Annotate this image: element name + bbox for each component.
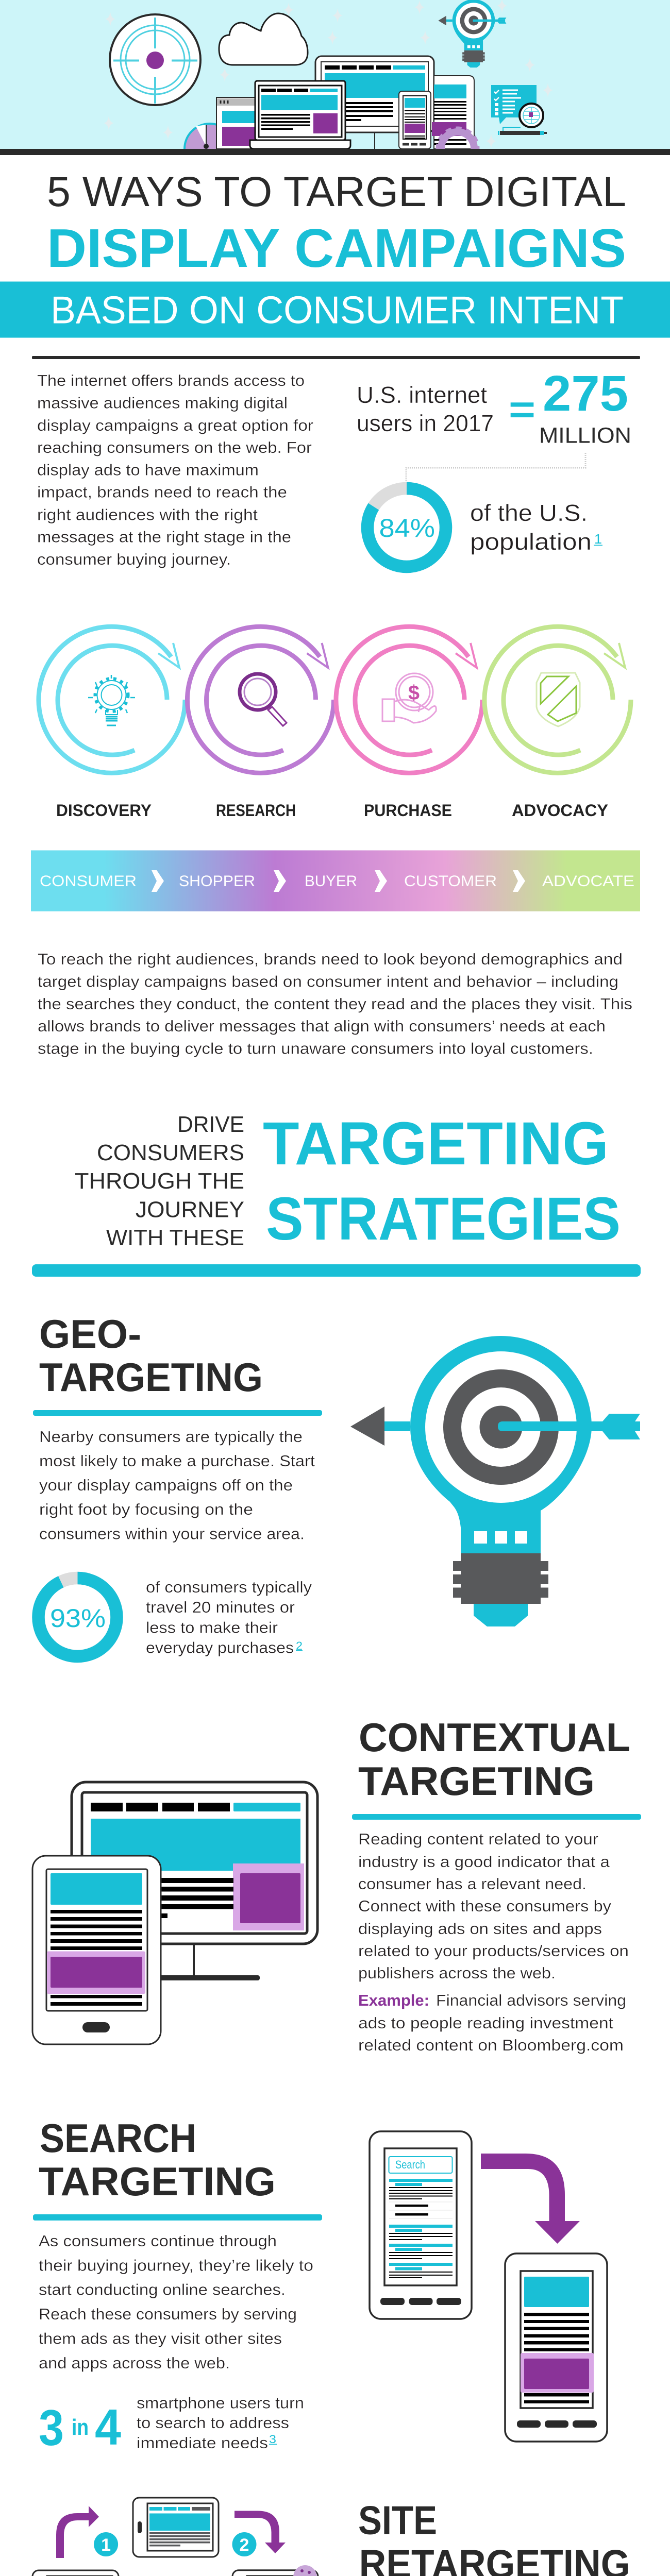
chart: 93% donut [38,1578,116,1656]
text block: contextual description: Financial advisors serving [436,1991,626,2009]
icon: gauge [183,123,216,149]
icon: cloud [219,13,308,65]
heading: geo-targeting: GEO- [39,1311,141,1357]
icon: magnifying glass [240,674,287,726]
text: 93% caption [146,1578,312,1657]
illustration: search results phone [370,2131,472,2319]
text block: contextual description: related content on Bloomberg.com [358,2036,624,2054]
stat: 3 in 4: in [72,2415,89,2440]
heading: contextual targeting [358,1715,630,1804]
chart: 84% donut: 84% [379,514,435,543]
gradient band: consumer to advocate: ADVOCATE [542,873,634,890]
panel: header illustration [0,0,670,149]
stage: advocacy loop [484,626,631,773]
heading: targeting strategies: TARGETING [263,1110,609,1178]
heading: contextual targeting: TARGETING [358,1758,595,1804]
text block: geo-targeting description [39,1428,315,1543]
illustration: desktop monitor [72,1782,317,1980]
text block: contextual description [358,1830,629,2054]
text block: geo-targeting description: right foot by focusing on the [39,1500,253,1518]
icon: target lightbulb with arrow [350,1336,640,1626]
gradient band: consumer to advocate: CUSTOMER [404,873,497,890]
heading: search targeting: SEARCH [40,2115,196,2161]
arrows: cycle [52,2506,286,2576]
text block: search description: them ads as they visit other sites [39,2329,282,2347]
text block: intro: right audiences with the right [37,506,258,523]
text: 93% caption: travel 20 minutes or [146,1598,295,1616]
banner: based on consumer intent [0,281,670,338]
heading: targeting strategies: STRATEGIES [266,1185,621,1253]
text: of the US population: 1 [594,531,602,547]
heading: drive consumers [75,1112,244,1250]
banner: based on consumer intent: BASED ON CONSUMER INTENT [51,289,624,332]
text block: intro: impact, brands need to reach the [37,483,287,501]
heading: main title [47,168,626,279]
text: smartphone stat caption: 3 [269,2433,276,2446]
text block: audience paragraph: To reach the right audiences, brands need to look beyond demographics and [38,950,623,968]
text block: intro: messages at the right stage in the [37,528,291,546]
text block: geo-targeting description: most likely to make a purchase. Start [39,1452,315,1470]
badges: cycle numbers: 1 [101,2535,111,2555]
text block: contextual description: related to your products/services on [358,1942,629,1960]
text block: geo-targeting description: your display campaigns off on the [39,1476,293,1494]
icon: shield [537,673,580,726]
heading: targeting strategies [263,1110,621,1253]
text: 93% caption: of consumers typically [146,1578,312,1596]
gradient band: consumer to advocate: BUYER [305,873,357,890]
heading: geo-targeting [39,1311,263,1400]
heading: contextual targeting: CONTEXTUAL [359,1715,630,1760]
icon: desktop monitor [315,56,434,149]
chart: 93% donut: 93% [50,1604,106,1633]
icon: globe [520,104,543,127]
labels: journey stages: PURCHASE [364,801,452,820]
labels: journey stages: ADVOCACY [512,801,608,820]
text block: audience paragraph [38,950,632,1058]
text block: contextual description: ads to people reading investment [358,2014,613,2032]
gradient band: consumer to advocate: SHOPPER [179,873,255,890]
heading: main title: DISPLAY CAMPAIGNS [47,218,626,279]
text block: intro: display campaigns a great option for [37,416,313,434]
text block: audience paragraph: allows brands to deliver messages that align with consumers’ needs at each [38,1017,606,1035]
stage: research loop [188,626,334,773]
text block: search description: start conducting online searches. [39,2280,286,2299]
stat: 275 million internet users: MILLION [539,423,631,448]
text block: search description: As consumers continue through [39,2232,277,2250]
text block: contextual description: Reading content related to your [358,1830,598,1848]
text block: search description: their buying journey, they’re likely to [39,2256,313,2274]
text: 93% caption: less to make their [146,1619,278,1636]
text block: intro: The internet offers brands access to [37,371,305,389]
icon: hand holding coin: $ [408,682,420,704]
heading: drive consumers: THROUGH THE [75,1168,244,1194]
text block: contextual description: Example: [358,1991,429,2009]
stat: 3 in 4: 4 [95,2399,121,2455]
section: contextual targeting [32,1715,641,2054]
tablet: right with cookie [232,2570,318,2576]
gradient band: consumer to advocate: CONSUMER [40,873,137,890]
text block: geo-targeting description: Nearby consumers are typically the [39,1428,303,1446]
panel: four stage cycle [39,626,631,773]
stat: 275 million internet users [357,365,631,448]
text: smartphone stat caption: immediate needs [137,2434,268,2452]
illustration: phone [32,1856,161,2044]
text: of the US population [470,500,602,555]
text block: audience paragraph: target display campaigns based on consumer intent and behavior – including [38,973,618,991]
icon: small target bulb [438,0,506,67]
text block: contextual description: consumer has a relevant need. [358,1875,587,1893]
heading: site retargeting [358,2498,630,2576]
stat: 275 million internet users: 275 [543,365,628,421]
text: smartphone stat caption: smartphone users turn [137,2394,304,2412]
text block: geo-targeting description: consumers within your service area. [39,1525,305,1543]
text block: intro: massive audiences making digital [37,394,288,412]
illustration: ad on phone [505,2253,607,2442]
icon: cookie [293,2565,317,2576]
stat: 3 in 4 [39,2399,121,2456]
icon: browser window [216,97,258,149]
icon: lightbulb gear [88,675,135,725]
icon: pen [498,127,547,135]
labels: journey stages: RESEARCH [216,801,296,820]
text: smartphone stat caption: to search to address [137,2414,289,2432]
icon: tablet [432,76,474,149]
text: 93% caption: 2 [296,1639,303,1652]
heading: drive consumers: JOURNEY [136,1197,244,1222]
text block: contextual description: displaying ads on sites and apps [358,1920,602,1938]
text block: contextual description: industry is a good indicator that a [358,1853,610,1871]
stat: 275 million internet users: users in 2017 [357,410,494,436]
diagram: retargeting cycle [32,2498,318,2576]
arrow: search to ad [481,2154,580,2244]
chart: 84% donut [367,488,446,567]
stat: 275 million internet users: U.S. internet [357,382,487,408]
heading: drive consumers: WITH THESE [106,1225,244,1250]
section: site retargeting [31,2498,640,2576]
heading: main title: 5 WAYS TO TARGET DIGITAL [47,168,626,215]
heading: drive consumers: CONSUMERS [97,1140,244,1165]
labels: journey stages: DISCOVERY [56,801,152,820]
heading: geo-targeting: TARGETING [39,1354,263,1400]
text block: search description [39,2232,313,2372]
stage: discovery loop [39,626,185,773]
text block: audience paragraph: the searches they conduct, the content they read and the places they visit. This [38,995,632,1013]
icon: crosshair target [110,14,200,105]
heading: search targeting [39,2115,276,2204]
text: smartphone stat caption [137,2394,304,2452]
text: 93% caption: everyday purchases [146,1638,294,1657]
icon: gear [436,127,479,149]
heading: search targeting: TARGETING [39,2159,276,2204]
heading: site retargeting: SITE [358,2498,437,2543]
text block: contextual description: publishers across the web. [358,1964,556,1982]
text block: intro: display ads to have maximum [37,461,259,479]
text block: intro [37,371,313,568]
text block: audience paragraph: stage in the buying cycle to turn unaware consumers into loyal customers. [38,1040,593,1058]
heading: drive consumers: DRIVE [177,1112,244,1137]
stat: 3 in 4: 3 [39,2399,64,2456]
tablet: top [133,2498,219,2557]
icon: hand holding coin [382,673,436,723]
text block: search description: and apps across the web. [39,2354,230,2372]
illustration: search results phone: Search [395,2158,425,2171]
gradient band: consumer to advocate [31,850,640,911]
text block: intro: consumer buying journey. [37,550,231,568]
text block: contextual description: Connect with these consumers by [358,1897,612,1915]
text block: intro: reaching consumers on the web. For [37,438,312,456]
stat: 275 million internet users: = [509,388,535,432]
badges: cycle numbers: 2 [240,2535,249,2555]
text block: search description: Reach these consumers by serving [39,2305,297,2323]
icon: phone [399,91,431,149]
section: geo-targeting [33,1311,640,1657]
text: of the US population: of the U.S. [470,500,588,526]
icon: checklist speech bubble [491,85,537,124]
stage: purchase loop [336,626,482,773]
icon: laptop [250,81,350,149]
section: search targeting [33,2115,607,2456]
labels: journey stages [56,801,608,820]
badges: cycle numbers [94,2532,257,2576]
tablet: left with ads [32,2570,119,2576]
text: of the US population: population [470,529,592,555]
